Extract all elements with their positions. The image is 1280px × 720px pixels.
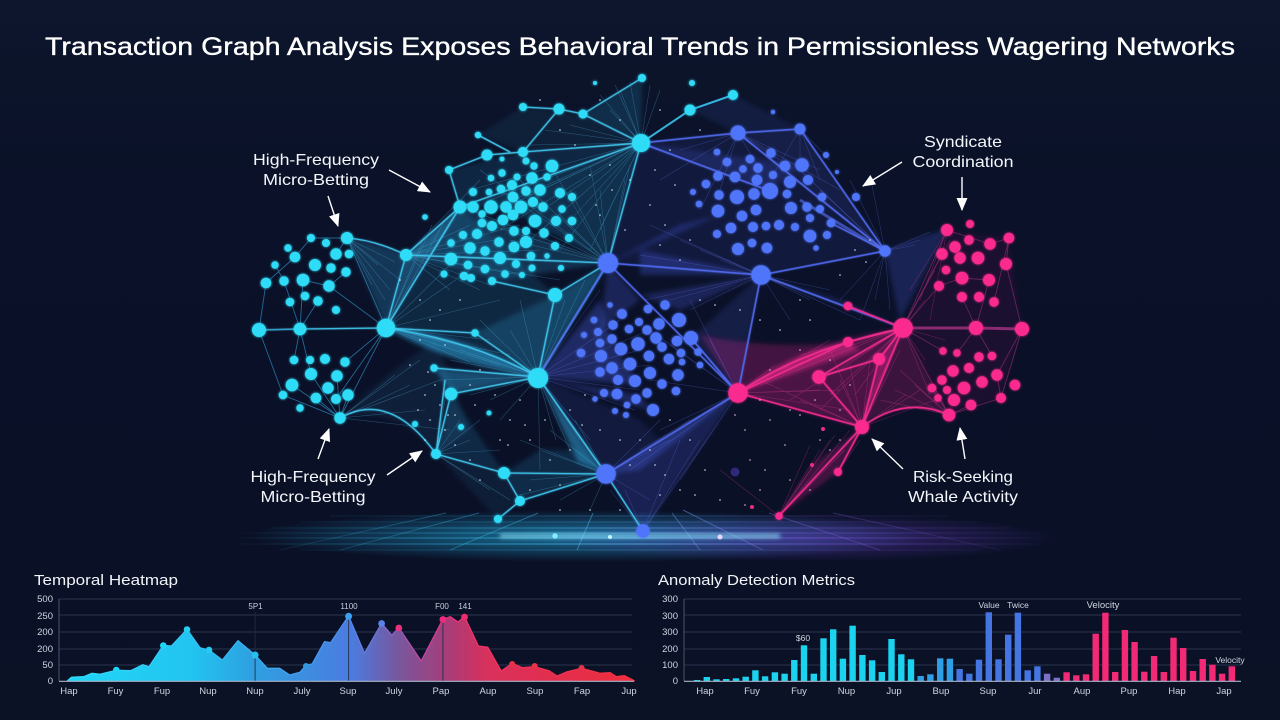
y axis labels: 100: [662, 660, 678, 671]
area chart peak labels: F00: [435, 602, 449, 611]
y axis labels: 200: [662, 644, 678, 655]
cluster meshes: [259, 238, 386, 418]
bar chart callout labels: Twice: [1007, 600, 1029, 610]
x axis labels: Hap: [1168, 686, 1186, 697]
bar chart callout labels: Velocity: [1215, 655, 1245, 665]
x axis labels: July: [386, 686, 403, 697]
callout: risk-seeking whale activity: Risk-Seeking: [913, 469, 1013, 486]
x axis labels: Pup: [1121, 686, 1137, 697]
x axis labels: Fuy: [744, 686, 760, 697]
x axis labels: Nup: [246, 686, 264, 697]
callout: syndicate coordination: [863, 134, 1014, 210]
x axis labels: [60, 686, 637, 697]
x axis labels: Sup: [340, 686, 356, 697]
y axis labels: 0: [673, 676, 678, 687]
title: Transaction Graph Analysis Exposes Behavioral Trends in Permissionless Wagering Networks: [45, 33, 1235, 61]
y axis labels: 50: [42, 660, 53, 671]
y axis labels: 200: [37, 627, 53, 638]
x axis labels: Fup: [154, 686, 170, 697]
callout: high-frequency micro-betting (bottom): High-Frequency: [250, 469, 376, 486]
area chart peak labels: 5P1: [248, 602, 263, 611]
blue hub nodes: [596, 110, 891, 538]
x axis labels: July: [294, 686, 311, 697]
callout: high-frequency micro-betting (top): Micro-Betting: [263, 172, 369, 189]
callout: high-frequency micro-betting (bottom): Micro-Betting: [260, 489, 366, 506]
area chart peak labels: 141: [458, 602, 472, 611]
y axis labels: [37, 594, 53, 687]
x axis labels: Nup: [199, 686, 217, 697]
x axis labels: Sup: [527, 686, 543, 697]
blue edge fans: [538, 95, 947, 531]
heading: anomaly detection metrics: Anomaly Detection Metrics: [658, 572, 855, 589]
panel: anomaly detection metrics: [658, 572, 1245, 697]
scattered data specks: [400, 100, 870, 510]
bar chart callout labels: [796, 600, 1245, 665]
fine blue fan lines: [538, 129, 930, 531]
cyan hub nodes: [377, 74, 738, 523]
y axis labels: 300: [662, 627, 678, 638]
x axis labels: Aup: [1074, 686, 1090, 697]
x axis labels: Jup: [886, 686, 902, 697]
callout: risk-seeking whale activity: Whale Activity: [908, 489, 1018, 506]
network web: edge bundles: [259, 78, 1022, 531]
x axis labels: Fuy: [791, 686, 807, 697]
x axis labels: Sup: [980, 686, 996, 697]
pink node clusters: [728, 220, 1029, 520]
lower pink cluster: [928, 347, 1020, 421]
upper pink cluster: [934, 220, 1014, 307]
callout: high-frequency micro-betting (top): [253, 152, 430, 226]
callout: high-frequency micro-betting (bottom): [250, 429, 422, 506]
x axis labels: Jap: [1216, 686, 1232, 697]
y axis labels: 500: [37, 594, 53, 605]
cyan edge fans: [340, 78, 642, 519]
glowing grid floor: [240, 510, 1060, 562]
bar chart: [684, 599, 1241, 681]
callout: syndicate coordination: Syndicate: [924, 134, 1002, 151]
y axis labels: 250: [37, 611, 53, 622]
x axis labels: Fap: [574, 686, 590, 697]
bar chart callout labels: Value: [978, 600, 1000, 610]
cyan node clusters: [252, 74, 738, 523]
blue node clusters: [577, 110, 891, 538]
y axis labels: 300: [662, 594, 678, 605]
x axis labels: Hap: [60, 686, 78, 697]
panel: temporal heatmap: [34, 572, 637, 697]
main pink edges: [738, 306, 949, 516]
upper cyan cluster: [440, 156, 576, 285]
bar chart callout labels: $60: [796, 633, 810, 643]
pink hub nodes: [728, 302, 1029, 520]
x axis labels: Aup: [480, 686, 496, 697]
x axis labels: Pap: [433, 686, 449, 697]
left cyan cluster: [252, 232, 354, 424]
fine cyan fan lines: [340, 82, 660, 510]
y axis labels: 0: [48, 676, 53, 687]
x axis labels: Hap: [696, 686, 714, 697]
callout: risk-seeking whale activity: [872, 428, 1018, 506]
bar chart callout labels: Velocity: [1087, 600, 1120, 611]
area chart peak labels: 1100: [340, 602, 358, 611]
pink edge fans: [700, 230, 1022, 516]
callout: high-frequency micro-betting (top): High-Frequency: [253, 152, 379, 169]
y axis labels: 200: [37, 644, 53, 655]
y axis labels: [662, 594, 678, 687]
central blue cluster: [577, 300, 703, 418]
y axis labels: 300: [662, 611, 678, 622]
area chart peak labels: [248, 602, 472, 611]
x axis labels: Nup: [838, 686, 855, 697]
callout: syndicate coordination: Coordination: [912, 154, 1014, 171]
area chart: [59, 599, 635, 681]
x axis labels: Jup: [621, 686, 637, 697]
x axis labels: Bup: [933, 686, 949, 697]
heading: temporal heatmap: Temporal Heatmap: [34, 572, 178, 589]
main blue edges: [538, 129, 903, 474]
fine pink fan lines: [720, 230, 950, 516]
main cyan edges: [259, 78, 643, 531]
x axis labels: Jur: [1028, 686, 1042, 697]
upper blue cluster: [690, 148, 835, 255]
x axis labels: [696, 686, 1232, 697]
x axis labels: Fuy: [108, 686, 124, 697]
